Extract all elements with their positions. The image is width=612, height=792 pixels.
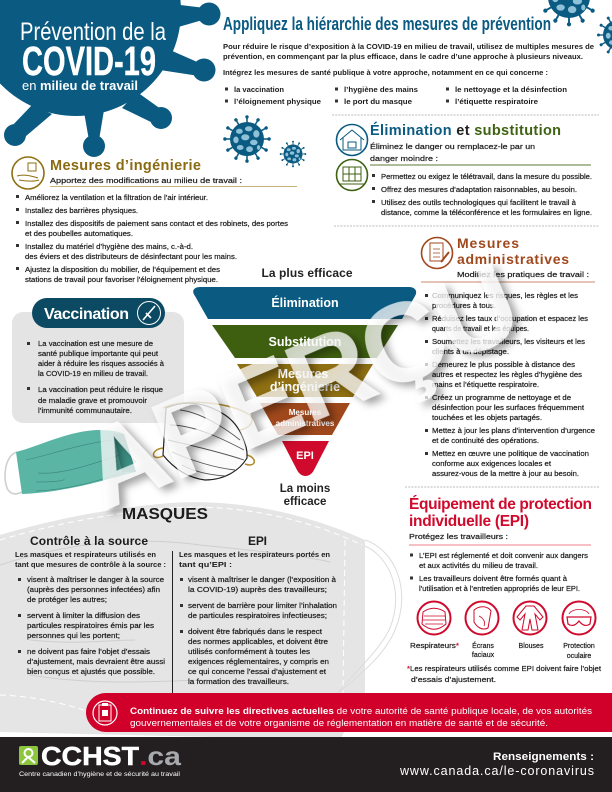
- bullet list: Créez un programme de nettoyage et de: [432, 395, 571, 402]
- column: PPE: doivent être fabriqués dans le respect: [188, 629, 322, 636]
- column: PPE: EPI: [248, 534, 267, 548]
- tier: administrative: administratives: [276, 419, 335, 428]
- bullet list: [16, 195, 289, 284]
- column: source control: Contrôle à la source: [30, 534, 148, 548]
- more information: www.canada.ca/le-coronavirus: [399, 764, 594, 778]
- callout: follow current directives: [86, 693, 612, 732]
- column: source control: ne doivent pas faire l’objet d’essais: [27, 649, 151, 656]
- heading: administratives: [457, 251, 569, 267]
- bullet list: [425, 293, 595, 478]
- tier: administrative: Mesures: [289, 408, 322, 417]
- logo: CCHST: Centre canadien d’hygiène et de sécurité au travail: [19, 771, 181, 778]
- footnote: d’essais d’ajustement.: [411, 677, 496, 684]
- column: source control: visent à maîtriser le danger à la source: [27, 577, 164, 584]
- column: source control: personnes qui les portent;: [27, 633, 120, 640]
- vaccination bullets: de maladie grave et promouvoir: [38, 398, 148, 405]
- heading: masks: MASQUES: [122, 506, 208, 523]
- bullet list: Soumettez les travailleurs, les visiteurs et les: [432, 339, 586, 346]
- bullet list: mains et l’étiquette respiratoire.: [432, 382, 539, 389]
- icon: medical clipboard: [93, 701, 117, 725]
- column: PPE: tant qu’EPI :: [179, 562, 232, 569]
- callout text: gouvernementales et de votre organisme de réglementation en matière de santé et de sécurité.: [130, 718, 548, 728]
- virus title blob: [0, 0, 220, 157]
- tier: PPE: [282, 441, 329, 476]
- title: Prévention de la: [20, 18, 166, 46]
- tier: engineering: Mesures: [278, 367, 328, 381]
- icon: face shield: [466, 602, 498, 634]
- heading: Équipement de protection: [409, 496, 592, 513]
- intro text: Pour réduire le risque d’exposition à la COVID-19 en milieu de travail, utilisez de multiples mesures de: [223, 44, 594, 51]
- heading: Élimination et substitution: [370, 122, 561, 139]
- bullet list: quarts de travail et les équipes.: [432, 326, 529, 333]
- column: source control: [15, 534, 166, 676]
- column: PPE: ce qui concerne l’essai d’ajustement et: [188, 669, 326, 676]
- bullet list: Demeurez le plus possible à distance des: [432, 362, 576, 369]
- vaccination pill heading: [32, 298, 165, 328]
- column: PPE: servent de barrière pour limiter l’inhalation: [188, 603, 337, 610]
- more information: [399, 751, 594, 778]
- bullet list: Permettez ou exigez le télétravail, dans la mesure du possible.: [381, 174, 592, 181]
- vaccination bullets: l’immunité communautaire.: [38, 408, 132, 415]
- label: least effective: efficace: [284, 496, 326, 508]
- vaccination bullets: [27, 341, 164, 415]
- vaccination bullets: la COVID-19 en milieu de travail.: [38, 371, 148, 378]
- panel: masks: [15, 506, 337, 694]
- vaccination bullets: santé publique importante qui peut: [38, 351, 158, 358]
- logo: CCHST: CCHST: [41, 741, 139, 771]
- panel: engineering controls: [12, 157, 297, 284]
- panel: vaccination: [12, 298, 184, 423]
- tier: administrative: [260, 403, 350, 435]
- icon labels: [410, 641, 595, 660]
- bullet list: et de continuité des opérations.: [432, 438, 539, 445]
- bullet list: stations de travail pour favoriser l’éloignement physique.: [25, 277, 218, 284]
- intro text: [223, 44, 594, 77]
- heading: Mesures d’ingénierie: [50, 158, 201, 174]
- logo: CCHST: .ca: [139, 741, 182, 771]
- column: PPE: la COVID-19) auprès des travailleurs;: [188, 587, 327, 594]
- bullet list: [372, 174, 592, 217]
- tier: engineering: d’ingénierie: [270, 380, 340, 394]
- bullet list: Communiquez les risques, les règles et les: [432, 293, 579, 300]
- bullet list: assurez-vous de la mettre à jour au besoin.: [432, 471, 579, 478]
- heading: [457, 235, 569, 267]
- footer: [0, 737, 612, 792]
- heading: Mesures: [457, 235, 519, 251]
- bullet list: [410, 553, 589, 593]
- icon: home work: [336, 124, 368, 156]
- intro text: Intégrez les mesures de santé publique à votre approche, notamment en ce qui concerne :: [223, 70, 548, 77]
- icon labels: Écrans: [472, 641, 494, 650]
- bullet list: conforme aux exigences locales et: [432, 461, 551, 468]
- subheading: Modifiez les pratiques de travail :: [457, 272, 589, 279]
- bullet list: Les travailleurs doivent être formés quant à: [419, 576, 567, 583]
- intro text: prévention, en commençant par la plus efficace, dans le cadre d’une approche à plusieurs niveaux.: [223, 54, 583, 61]
- icon: clipboard: [422, 238, 452, 268]
- public health bullet list: l’hygiène des mains: [344, 87, 418, 94]
- subheading: Protégez les travailleurs :: [409, 534, 508, 541]
- public health bullet list: l’éloignement physique: [234, 99, 321, 106]
- bullet list: Réduisez les taux d’occupation et espacez les: [432, 316, 589, 323]
- bullet list: Offrez des mesures d’adaptation raisonnables, au besoin.: [381, 187, 577, 194]
- column: PPE: Les masques et les respirateurs portés en: [179, 552, 330, 559]
- bullet list: Mettez en œuvre une politique de vaccination: [432, 451, 589, 458]
- column: PPE: visent à maîtriser le danger (l’exposition à: [188, 577, 336, 584]
- panel: personal protective equipment: [407, 496, 601, 684]
- more information: Renseignements :: [493, 751, 594, 763]
- bullet list: Améliorez la ventilation et la filtration de l’air intérieur.: [25, 195, 208, 202]
- icon labels: Protection: [563, 643, 595, 650]
- vaccination bullets: aider à réduire les risques associés à: [38, 361, 164, 368]
- logo: CCHST: [19, 741, 182, 778]
- vaccination bullets: La vaccination est une mesure de: [38, 341, 153, 348]
- illustration: surgical mask: [5, 430, 136, 494]
- background mask shape: masques panel: [0, 502, 402, 740]
- icon: hand sanitizer: [12, 157, 44, 189]
- bullet list: Utilisez des outils technologiques qui facilitent le travail à: [381, 200, 576, 207]
- column: source control: servent à limiter la diffusion des: [27, 613, 141, 620]
- public health bullet list: [225, 87, 567, 106]
- bullet list: Installez du matériel d’hygiène des mains, c.-à-d.: [25, 244, 193, 251]
- panel: elimination and substitution: [336, 122, 592, 217]
- subheading: Éliminez le danger ou remplacez-le par un: [370, 142, 535, 151]
- icon labels: Blouses: [519, 643, 544, 650]
- bullet list: l’utilisation et à l’entretien appropriés de leur EPI.: [419, 586, 580, 593]
- bullet list: distance, comme la téléconférence et les formulaires en ligne.: [381, 210, 592, 217]
- public health bullet list: l’étiquette respiratoire: [455, 99, 538, 106]
- tier: engineering: [237, 364, 373, 397]
- icon labels: faciaux: [472, 652, 495, 659]
- icon: respirator: [418, 602, 450, 634]
- icon: virus small: [280, 141, 306, 167]
- column: source control: de protéger les autres;: [27, 597, 107, 604]
- icon labels: Respirateurs *: [410, 643, 459, 650]
- bullet list: touchées et les objets partagés.: [432, 415, 542, 422]
- bullet list: L’EPI est réglementé et doit convenir aux dangers: [419, 553, 589, 560]
- panel: administrative controls: [421, 235, 595, 478]
- watermark: APERÇU: [63, 239, 537, 534]
- column: PPE: de particules respiratoires infectieuses;: [188, 613, 327, 620]
- heading: [409, 496, 592, 530]
- icon: goggles: [562, 602, 596, 634]
- column: source control: d’ajustement, mais devraient être aussi: [27, 659, 165, 666]
- callout text: Continuez de suivre les directives actuelles de votre autorité de santé publique locale, de vos autorités: [130, 706, 593, 716]
- bullet list: Ajustez la disposition du mobilier, de l’équipement et des: [25, 267, 221, 274]
- title: COVID-19: [22, 38, 156, 84]
- label: most effective: La plus efficace: [262, 266, 353, 280]
- column: PPE: des normes applicables, et doivent être: [188, 639, 328, 646]
- label: least effective: La moins: [280, 483, 330, 495]
- subheading: danger moindre :: [370, 156, 438, 163]
- column: source control: (auprès des personnes infectées) afin: [27, 587, 160, 594]
- bullet list: et des poubelles automatiques.: [25, 231, 133, 238]
- icon: virus top right: [540, 0, 598, 26]
- footnote: *Les respirateurs utilisés comme EPI doivent faire l’objet: [407, 666, 601, 673]
- column: source control: bien conçus et ajustés que possible.: [27, 669, 155, 676]
- tier: elimination: [193, 287, 416, 319]
- column: PPE: utilisés conformément à toutes les: [188, 649, 311, 656]
- icon labels: oculaire: [567, 653, 591, 660]
- heading: individuelle (EPI): [409, 513, 529, 530]
- subheading: Apportez des modifications au milieu de travail :: [50, 178, 242, 185]
- tier: PPE: EPI: [296, 450, 314, 462]
- bullet list: Installez des dispositifs de paiement sans contact et des robinets, des portes: [25, 221, 289, 228]
- column: source control: Les masques et respirateurs utilisés en: [15, 552, 156, 559]
- bullet list: procédures à tous.: [432, 303, 496, 310]
- illustration: N95 mask: [153, 402, 254, 480]
- bullet list: Installez des barrières physiques.: [25, 208, 138, 215]
- tier: substitution: Substitution: [269, 335, 341, 349]
- column: source control: tant que mesures de contrôle à la source :: [15, 562, 166, 569]
- icon: gown: [514, 602, 546, 634]
- bullet list: clients à un dépistage.: [432, 349, 509, 356]
- column: PPE: [179, 534, 337, 686]
- bullet list: désinfection pour les surfaces fréquemment: [432, 405, 584, 412]
- public health bullet list: la vaccination: [234, 87, 284, 94]
- bullet list: autres et respectez les règles d’hygiène des: [432, 372, 583, 379]
- tier: elimination: Élimination: [271, 295, 339, 310]
- vaccination bullets: La vaccination peut réduire le risque: [38, 387, 163, 394]
- icon: virus right edge: [597, 14, 612, 56]
- callout text: [130, 706, 593, 728]
- icon: laptop meeting: [336, 160, 368, 190]
- bullet list: Mettez à jour les plans d’intervention d’urgence: [432, 428, 595, 435]
- column: PPE: exigences réglementaires, y compris en: [188, 659, 329, 666]
- icon: virus large: [223, 115, 271, 163]
- title: en milieu de travail: [22, 78, 138, 93]
- vaccination pill heading: Vaccination: [44, 306, 129, 323]
- bullet list: des éviers et des distributeurs de désinfectant pour les mains.: [25, 254, 237, 261]
- title: [20, 18, 166, 93]
- tier: substitution: [212, 325, 398, 358]
- pyramid: hierarchy of controls: [193, 266, 416, 508]
- bullet list: et aux activités du milieu de travail.: [419, 563, 538, 570]
- column: source control: particules respiratoires émis par les: [27, 623, 155, 630]
- label: least effective: [280, 483, 330, 508]
- public health bullet list: le port du masque: [344, 99, 412, 106]
- footnote: [407, 666, 601, 684]
- public health bullet list: le nettoyage et la désinfection: [455, 87, 567, 94]
- column: PPE: la formation des travailleurs.: [188, 679, 289, 686]
- subheading: [370, 142, 535, 163]
